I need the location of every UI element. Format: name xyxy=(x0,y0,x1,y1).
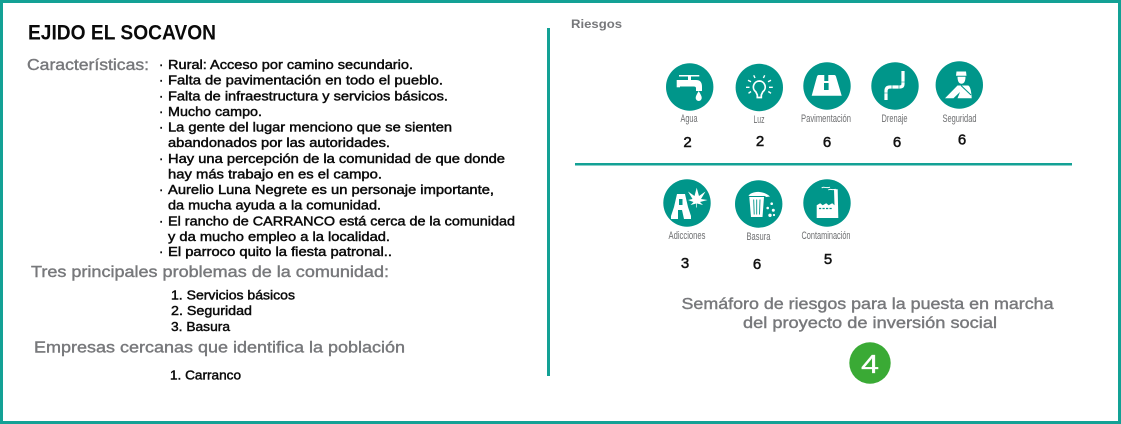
label: seguridad: Seguridad xyxy=(942,113,976,125)
list: características: · xyxy=(159,182,163,197)
label: adicciones: Adicciones xyxy=(668,230,706,242)
badge: semáforo xyxy=(849,342,891,384)
list: características: · xyxy=(159,213,163,228)
heading: semáforo de riesgos xyxy=(682,296,1054,332)
list: características: El parroco quito la fiesta patronal.. xyxy=(168,244,392,259)
list: características: abandonados por las autoridades. xyxy=(168,135,390,150)
label: drenaje: Drenaje xyxy=(882,113,908,125)
heading: tres principales problemas: Tres principales problemas de la comunidad: xyxy=(31,264,389,281)
icon: basura xyxy=(735,180,782,228)
value: agua: 2 xyxy=(683,134,692,151)
icon: seguridad xyxy=(936,61,983,109)
icon: adicciones xyxy=(663,179,711,227)
value: seguridad: 6 xyxy=(958,132,966,148)
list: características: Hay una percepción de la comunidad de que donde xyxy=(168,151,505,166)
label: luz: Luz xyxy=(754,114,764,126)
list: problemas: 2. Seguridad xyxy=(171,303,252,318)
list: características: · xyxy=(159,104,163,119)
list: características: El rancho de CARRANCO está cerca de la comunidad xyxy=(168,213,515,228)
icon: luz xyxy=(736,64,783,111)
list: características: · xyxy=(159,57,163,72)
title: EJIDO EL SOCAVON xyxy=(28,22,216,44)
list: características: · xyxy=(159,88,163,103)
list: características: · xyxy=(159,151,163,166)
list: características xyxy=(159,57,515,259)
list: características: Aurelio Luna Negrete es un personaje importante, xyxy=(168,182,494,197)
list: características: da mucha ayuda a la comunidad. xyxy=(168,198,381,213)
label: basura: Basura xyxy=(746,231,771,243)
heading: riesgos: Riesgos xyxy=(571,17,622,31)
list: características: · xyxy=(159,120,163,135)
list: problemas xyxy=(171,288,296,334)
badge: semáforo: 4 xyxy=(861,349,879,379)
heading: semáforo de riesgos: Semáforo de riesgos para la puesta en marcha xyxy=(682,296,1054,313)
value: drenaje: 6 xyxy=(893,134,901,151)
value: adicciones: 3 xyxy=(681,255,689,272)
heading: empresas cercanas: Empresas cercanas que identifica la población xyxy=(34,340,405,356)
value: contaminación: 5 xyxy=(824,251,832,268)
list: características: y da mucho empleo a la localidad. xyxy=(168,229,390,244)
list: características: Mucho campo. xyxy=(168,104,262,119)
label: agua: Agua xyxy=(680,113,698,125)
value: pavimentación: 6 xyxy=(823,134,831,151)
list: características: · xyxy=(159,73,163,88)
list: problemas: 1. Servicios básicos xyxy=(171,288,296,302)
icon: agua xyxy=(666,63,713,111)
list: características: · xyxy=(159,244,163,259)
list: problemas: 3. Basura xyxy=(171,319,231,334)
heading: características: Características: xyxy=(27,57,149,74)
list: características: hay más trabajo en es el campo. xyxy=(168,166,382,181)
label: contaminación: Contaminación xyxy=(802,230,850,242)
list: características: Rural: Acceso por camino secundario. xyxy=(168,57,413,72)
icon: drenaje xyxy=(871,62,919,110)
label: pavimentación: Pavimentación xyxy=(801,113,851,125)
icon: contaminación xyxy=(803,179,851,227)
list: características: Falta de infraestructura y servicios básicos. xyxy=(168,88,448,103)
value: basura: 6 xyxy=(753,256,761,273)
list: empresas: 1. Carranco xyxy=(170,368,241,382)
icon: pavimentación xyxy=(803,62,851,110)
heading: semáforo de riesgos: del proyecto de inversión social xyxy=(743,315,997,332)
list: características: Falta de pavimentación en todo el pueblo. xyxy=(168,73,443,88)
list: características: La gente del lugar menciono que se sienten xyxy=(168,120,452,135)
value: luz: 2 xyxy=(756,133,764,150)
